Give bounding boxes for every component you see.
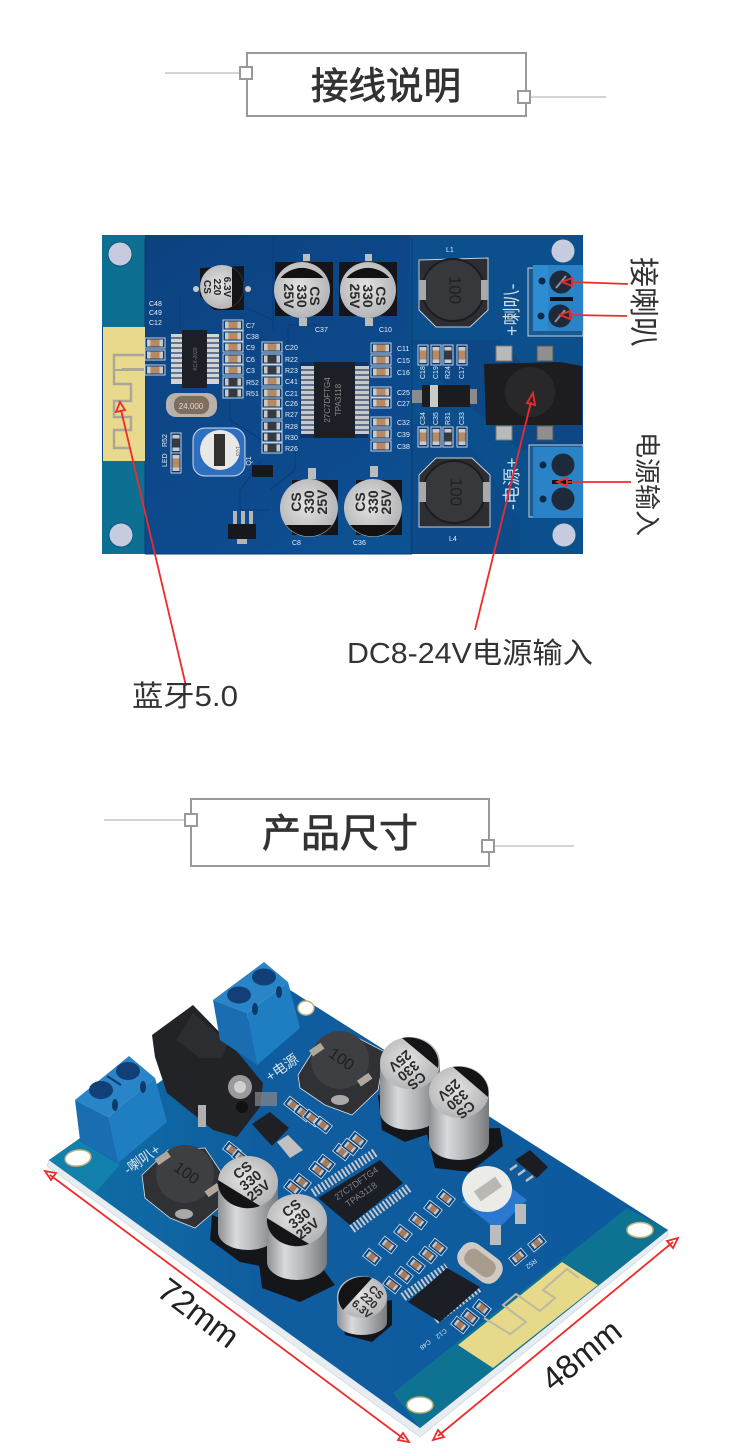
antenna pad [458,1262,598,1368]
heading: product dimensions [104,799,574,866]
SMD component columns with silkscreen labels: C38 [397,444,410,451]
capacitor group, right: CS [453,1098,479,1122]
diode [252,1112,303,1158]
large capacitors bottom row [280,466,402,537]
SMD component columns with silkscreen labels: R22 [285,357,298,364]
board surface [49,990,668,1428]
inductor near power terminal: 100 [325,1045,357,1074]
arrow: speaker top [562,278,628,286]
board edge [47,1160,668,1437]
SMD component columns with silkscreen labels: L4 [449,536,457,543]
SMD component columns with silkscreen labels: R52 [162,434,169,447]
SMD component columns with silkscreen labels: C32 [397,420,410,427]
SMD components [223,1096,546,1351]
inductor near speaker terminal: 100 [170,1159,202,1188]
SMD component columns with silkscreen labels: C27 [397,401,410,408]
capacitor group, left: CS [279,1196,304,1220]
dimension line: 72mm [45,1171,409,1442]
mounting holes [108,239,576,547]
silkscreen labels: -喇叭+ [121,1141,163,1177]
capacitor group, right: 25V [434,1076,464,1105]
capacitor group, right: 25V [385,1047,415,1076]
SMD component columns with silkscreen labels: R51 [246,391,259,398]
SMD component columns with silkscreen labels: R31 [445,412,452,425]
SMD component columns with silkscreen labels: C9 [246,345,255,352]
SMD component columns with silkscreen labels: C15 [397,358,410,365]
small capacitor perspective: 6.3V [349,1298,375,1322]
arrow: bluetooth [116,402,186,686]
SMD component columns with silkscreen labels: C34 [420,412,427,425]
SMD component columns with silkscreen labels: C6 [246,357,255,364]
SMD component columns with silkscreen labels: C11 [397,346,409,353]
power jack [484,346,582,440]
small capacitor perspective: 220 [358,1291,380,1312]
inductor L1: 100 [446,276,465,304]
top view circuit board [102,235,583,554]
main amplifier chip [313,1152,410,1229]
SMD component columns with silkscreen labels: C12 [149,320,162,327]
SMD component columns with silkscreen labels: C25 [397,390,410,397]
capacitor group, left: 25V [244,1176,274,1204]
small capacitor 220uF [193,265,251,310]
large capacitors bottom row: 330 [301,490,317,514]
inductor L1 [419,258,488,327]
SMD component columns with silkscreen labels: R27 [285,412,298,419]
silkscreen: speaker and power [502,283,522,510]
mounting holes [64,1001,653,1413]
main amplifier chip: TPA3118 [344,1180,379,1209]
inductor L4 [419,458,490,527]
crystal oscillator: 24.000 [179,402,204,411]
SMD component columns with silkscreen labels: C17 [459,366,466,379]
large capacitors bottom row: 25V [314,489,330,514]
silkscreen labels [121,1051,301,1177]
SMD component columns with silkscreen labels: C36 [353,540,366,547]
diode [412,385,477,407]
bluetooth antenna pad [103,327,145,461]
small capacitor 220uF: CS [201,280,212,294]
SMD component columns with silkscreen labels [145,247,467,547]
label: 48mm: 48mm [534,1312,629,1398]
main amplifier chip: 27C7DFTG4 [333,1165,380,1202]
inductor near power terminal [298,1031,385,1115]
main amplifier chip TPA3118: TPA3118 [334,383,343,416]
silkscreen: speaker and power: -电源+ [502,457,522,510]
terminal block right [213,962,300,1065]
bluetooth chip and crystal [403,1237,508,1322]
large capacitors top row [274,254,397,326]
SMD component columns with silkscreen labels: C37 [315,327,328,334]
main amplifier chip TPA3118: 27C7DFTG4 [323,377,332,423]
SMD component columns with silkscreen labels: R28 [285,424,298,431]
SMD components: C48 [418,1338,432,1351]
regulators [228,456,273,544]
SMD component columns with silkscreen labels: LED [162,453,169,467]
small capacitor perspective [337,1276,392,1342]
SMD component columns with silkscreen labels: C26 [285,401,298,408]
heading: wiring instructions [165,53,606,116]
SMD components: R52 [524,1257,538,1270]
SMD component columns with silkscreen labels: C41 [285,379,298,386]
trimmer potentiometer [193,428,245,476]
large capacitors bottom row: 330 [365,490,381,514]
label: connect speaker: 接喇叭 [626,257,659,347]
large capacitors bottom row: 25V [378,489,394,514]
label: DC input: DC8-24V电源输入 [347,637,593,670]
arrow: DC input [475,393,535,630]
SMD component columns with silkscreen labels: C20 [285,345,298,352]
SMD component columns with silkscreen labels: C19 [433,366,440,379]
capacitor group, left: 25V [293,1214,323,1242]
small capacitor perspective: CS [366,1283,385,1302]
SMD component columns with silkscreen labels: C3 [246,368,255,375]
transistor [510,1150,548,1181]
trimmer potentiometer: 103 [234,446,240,457]
large capacitors bottom row: CS [288,492,304,512]
main amplifier chip TPA3118 [300,362,369,438]
large capacitors top row: CS [307,286,323,306]
inductor near speaker terminal [142,1145,225,1228]
SMD component columns with silkscreen labels: R23 [285,368,298,375]
label: bluetooth 5.0: 蓝牙5.0 [132,680,238,713]
SMD component columns with silkscreen labels: C16 [397,370,410,377]
small capacitor 220uF: 220 [211,279,222,296]
large capacitors top row: 330 [294,284,310,308]
SMD component columns with silkscreen labels: C48 [149,301,162,308]
silkscreen labels: +电源 [263,1051,301,1084]
SMD component columns with silkscreen labels: C8 [292,540,301,547]
capacitor group, right: 330 [394,1057,423,1085]
SMD component columns with silkscreen labels: R26 [285,446,298,453]
regulators: Q1 [246,456,253,466]
SMD component columns with silkscreen labels: C49 [149,310,162,317]
SMD component columns with silkscreen labels: C35 [433,412,440,425]
heading: wiring instructions: 接线说明 [311,65,461,107]
power terminal block [529,445,583,518]
capacitor group, right: CS [404,1069,430,1093]
perspective view circuit board [47,962,668,1437]
capacitor group, left: CS [230,1158,255,1182]
large capacitors top row: 25V [347,284,363,309]
inductor L4: 100 [447,478,466,506]
arrow: speaker bottom [560,311,627,319]
SMD component columns with silkscreen labels: R24 [445,366,452,379]
Bluetooth chip: KCX-2020 [193,347,199,371]
large capacitors top row: CS [373,286,389,306]
heading: product dimensions: 产品尺寸 [262,813,418,856]
label: 72mm: 72mm [151,1270,246,1355]
SMD component columns with silkscreen labels: C39 [397,432,410,439]
arrow: power input [557,478,631,486]
crystal oscillator [166,393,217,417]
SMD component columns with silkscreen labels: C18 [420,366,427,379]
capacitor group, right: 330 [443,1086,472,1114]
power jack [152,1005,277,1137]
capacitor group, right [378,1037,503,1172]
SMD component columns with silkscreen labels: R52 [246,380,259,387]
large capacitors top row: 25V [281,284,297,309]
SMD components: C12 [434,1327,448,1340]
terminal block left [75,1056,167,1163]
large capacitors bottom row: CS [352,492,368,512]
SMD component columns with silkscreen labels: C10 [379,327,392,334]
potentiometer [462,1166,527,1245]
board base [102,235,583,554]
capacitor group, left: 330 [236,1167,265,1194]
SMD component columns with silkscreen labels: L1 [446,247,454,254]
silkscreen: speaker and power: +喇叭- [502,283,522,336]
SMD component columns with silkscreen labels: R30 [285,435,298,442]
dimension line: 48mm [433,1238,678,1440]
Bluetooth chip [171,330,219,388]
capacitor group, left [210,1156,335,1302]
capacitor group, left: 330 [285,1205,314,1232]
SMD component columns with silkscreen labels: C21 [285,391,298,398]
SMD component columns with silkscreen labels: C38 [246,334,259,341]
speaker terminal block [528,265,583,336]
small capacitor 220uF: 6.3V [221,277,232,298]
large capacitors top row: 330 [360,284,376,308]
SMD component columns with silkscreen labels: C7 [246,323,255,330]
label: power input: 电源输入 [632,432,662,536]
SMD component columns with silkscreen labels: C33 [459,412,466,425]
